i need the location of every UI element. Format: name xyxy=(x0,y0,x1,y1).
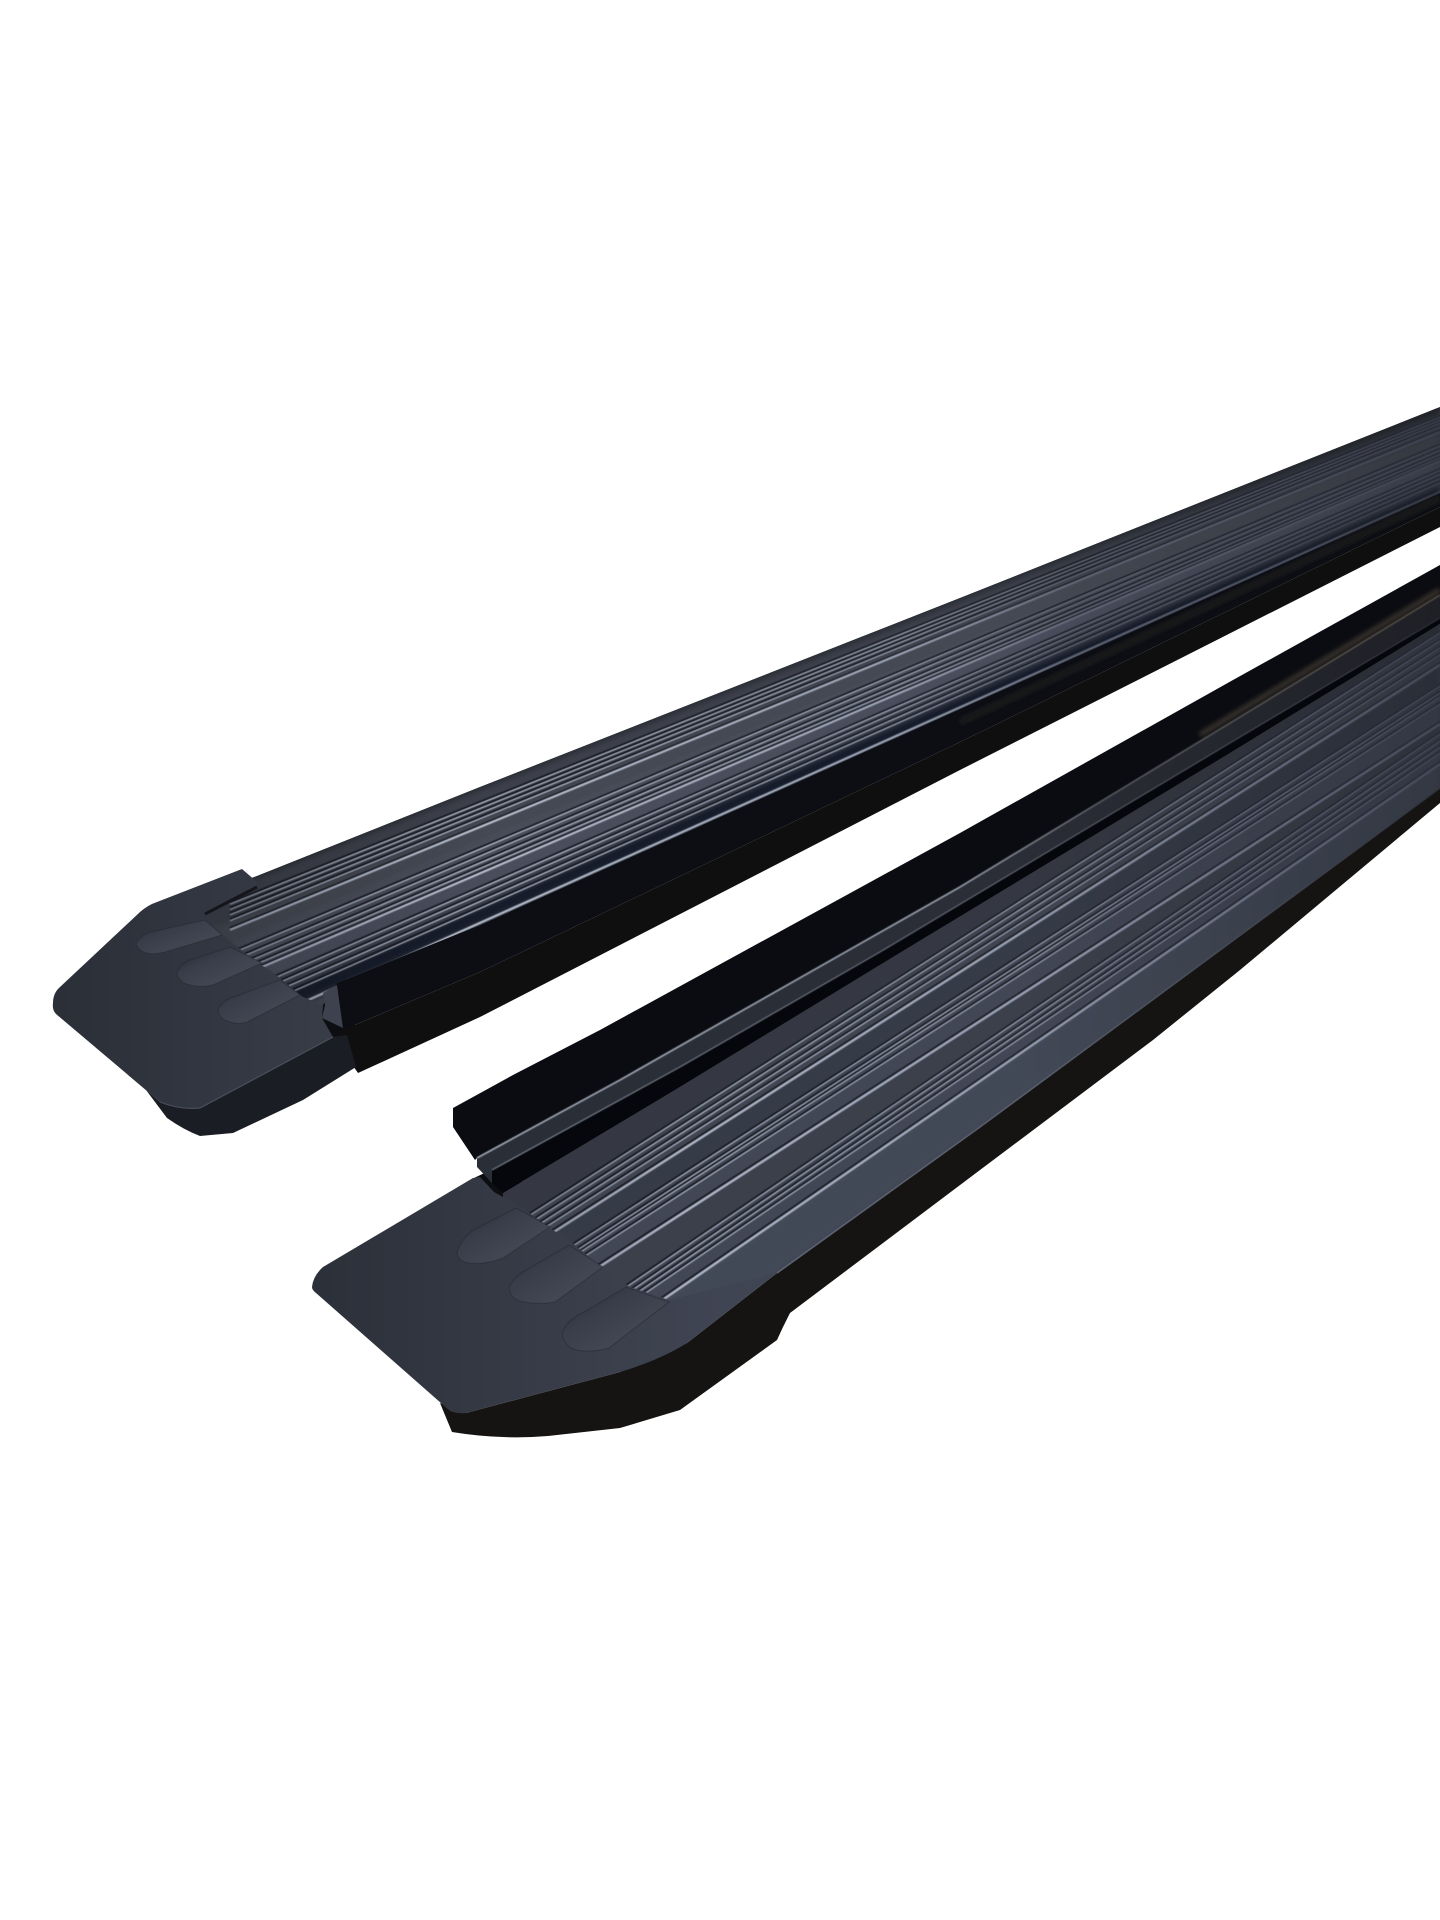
upper board: black C-channel upper band xyxy=(337,493,1440,1030)
lower board: black groove xyxy=(492,618,1440,1193)
lower board: end cap plate xyxy=(312,1177,777,1413)
upper running board xyxy=(53,397,1440,1136)
lower board: flange highlight xyxy=(477,595,1440,1158)
lower board: tread edge highlight xyxy=(777,788,1440,1273)
upper board: black C-channel lower band xyxy=(333,507,1440,1073)
upper board: end cap pad 2 xyxy=(177,947,262,986)
lower board: end cap pad 3 xyxy=(562,1287,669,1351)
upper board: channel sheen xyxy=(960,498,1440,722)
upper board: ribbed tread surface xyxy=(190,397,1440,1052)
upper board: end cap plate xyxy=(53,869,333,1108)
lower board: black side wall xyxy=(440,788,1440,1437)
upper board: plate edge highlight xyxy=(160,1037,333,1108)
upper board: end cap pad 1 xyxy=(136,920,222,954)
lower board: groove highlight xyxy=(492,618,1440,1170)
product photo: pair of black aluminium running boards xyxy=(52,407,1440,1438)
upper board: tab slot xyxy=(205,887,257,914)
lower board: backing under the end-cap notch xyxy=(474,1160,530,1210)
upper board: backing under end-cap notches xyxy=(195,880,360,1050)
upper board: rib end chip xyxy=(322,985,343,1028)
lower board: grey flange step xyxy=(477,595,1440,1183)
upper board: end cap pad 3 xyxy=(218,980,300,1024)
lower board: end cap pad 2 xyxy=(509,1245,603,1304)
lower running board xyxy=(312,565,1440,1438)
lower board: ribbed tread surface xyxy=(503,624,1440,1300)
lower board: black upper flange xyxy=(453,565,1440,1160)
lower board: end cap pad 1 xyxy=(457,1208,550,1263)
lower board: soft bronze sheen on flange xyxy=(1200,590,1440,735)
upper board: side wall of end cap xyxy=(146,1035,356,1136)
